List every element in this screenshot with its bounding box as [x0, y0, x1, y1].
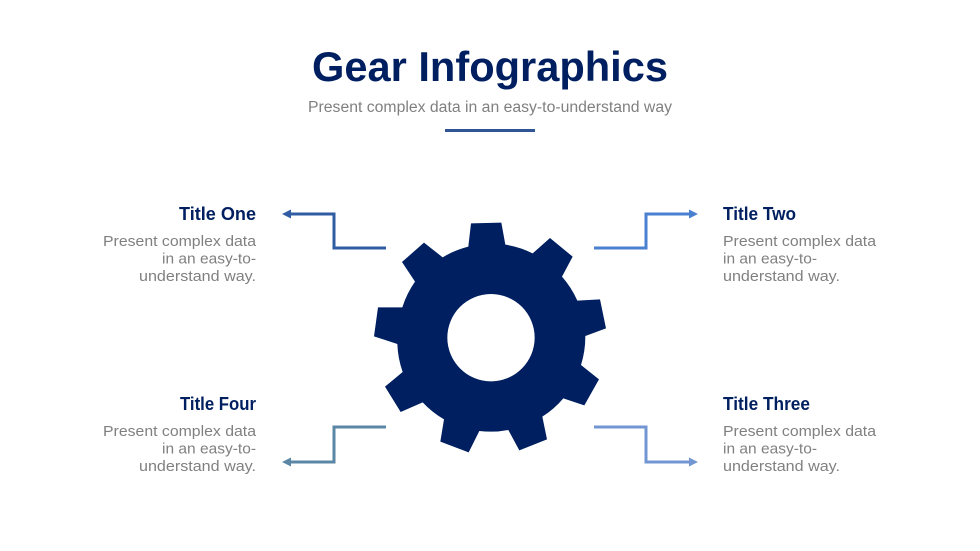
title: Gear Infographics — [312, 43, 668, 90]
panel: title four — [103, 394, 386, 475]
text block: title four: understand way. — [139, 458, 256, 475]
heading: title three: Title Three — [723, 394, 810, 414]
panel: title two — [594, 204, 877, 285]
text block: title one: understand way. — [139, 268, 256, 285]
text block: title one: Present complex data — [103, 233, 257, 250]
arrow: title one — [282, 210, 386, 248]
text block: title one — [103, 233, 257, 285]
arrow: title three — [594, 427, 698, 466]
text block: title one: in an easy-to- — [162, 250, 256, 268]
panel: title three — [594, 394, 877, 475]
text block: title four: Present complex data — [103, 423, 257, 440]
text block: title four — [103, 423, 257, 475]
heading: title four: Title Four — [180, 394, 256, 414]
subtitle: Present complex data in an easy-to-understand way — [308, 99, 672, 116]
text block: title two: understand way. — [723, 268, 840, 285]
heading: title two: Title Two — [723, 204, 796, 224]
text block: title three — [723, 423, 877, 475]
text block: title four: in an easy-to- — [162, 440, 256, 458]
text block: title two — [723, 233, 877, 285]
text block: title two: in an easy-to- — [723, 250, 817, 268]
text block: title two: Present complex data — [723, 233, 877, 250]
text block: title three: Present complex data — [723, 423, 877, 440]
text block: title three: understand way. — [723, 458, 840, 475]
title underline — [445, 129, 535, 132]
heading: title one: Title One — [179, 204, 256, 224]
arrow: title two — [594, 210, 698, 248]
text block: title three: in an easy-to- — [723, 440, 817, 458]
icon: gear — [374, 223, 606, 452]
arrow: title four — [282, 427, 386, 466]
panel: title one — [103, 204, 386, 285]
